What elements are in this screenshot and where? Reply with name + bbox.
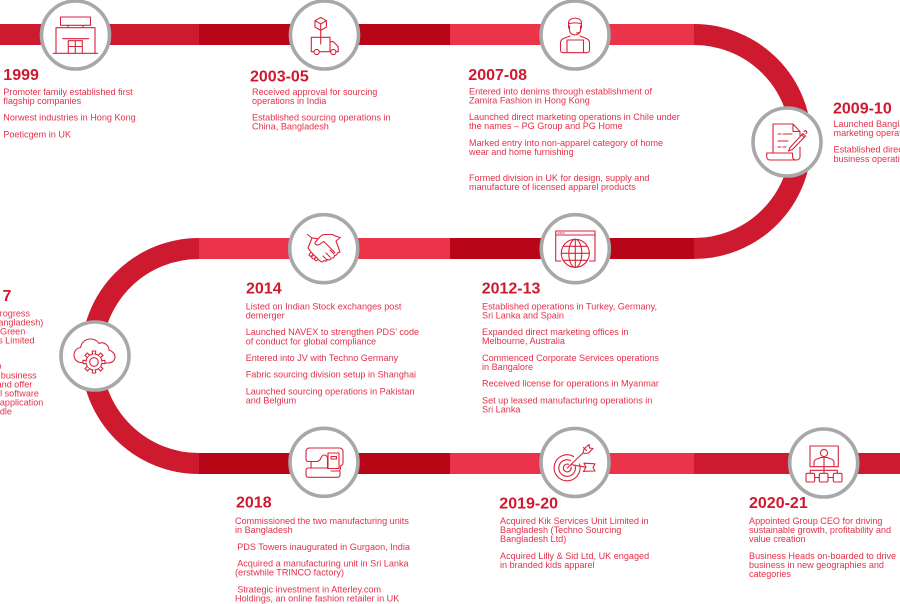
milestone: 2018 (235, 495, 411, 604)
milestone: 2019-20 (499, 495, 649, 570)
icon: storefront (42, 1, 110, 69)
milestone: 2014: Launched NAVEX to strengthen PDS’ code (246, 327, 419, 337)
milestone: 2014 (246, 281, 419, 406)
milestone: 2012-13: Sri Lanka (482, 405, 521, 415)
milestone: 2003-05 (250, 69, 391, 132)
milestone: 2003-05: Established sourcing operations in (252, 113, 391, 123)
milestone: cropped year ending in 7: l software (0, 388, 39, 398)
milestone: 2007-08: Marked entry into non-apparel category of home (469, 138, 663, 148)
milestone: 2007-08 (468, 67, 680, 192)
milestone: 2018: PDS Towers inaugurated in Gurgaon, India (237, 542, 411, 552)
milestone: 2020-21 (749, 495, 896, 579)
milestone: 2012-13: Sri Lanka and Spain (482, 310, 564, 320)
milestone: 2018: (erstwhile TRINCO factory) (235, 568, 344, 578)
milestone: 2018: Acquired a manufacturing unit in Sri Lanka (237, 559, 410, 569)
milestone: 2020-21: Appointed Group CEO for driving (749, 516, 882, 526)
milestone: 2012-13: Established operations in Turkey, Germany, (482, 301, 657, 311)
milestone: cropped year ending in 7: business (1, 370, 37, 380)
icon: target with arrows (541, 428, 609, 496)
milestone: 2009-10: 2009-10 (833, 101, 892, 118)
milestone: cropped year ending in 7: 7 (2, 288, 12, 305)
milestone: 2020-21: 2020-21 (749, 495, 808, 512)
milestone: 2018: Commissioned the two manufacturing units (235, 516, 409, 526)
milestone: 2019-20: Acquired Lilly & Sid Ltd, UK engaged (500, 551, 649, 561)
milestone: 2012-13: Commenced Corporate Services operations (482, 353, 659, 363)
milestone: 2012-13 (482, 281, 659, 415)
milestone: 2018: Holdings, an online fashion retailer in UK (235, 594, 399, 604)
milestone: 2007-08: Entered into denims through establishment of (469, 86, 652, 96)
milestone: 2007-08: the names – PG Group and PG Home (469, 121, 623, 131)
icon: document with pen (753, 108, 821, 176)
milestone: 1999: Poeticgem in UK (3, 129, 71, 139)
milestone: 2019-20: in branded kids apparel (500, 560, 595, 570)
icon: headset agent with laptop (541, 1, 609, 69)
milestone: 2007-08: wear and home furnishing (468, 147, 574, 157)
milestone: 2020-21: business in new geographies and (749, 560, 884, 570)
milestone: 2007-08: Launched direct marketing operations in Chile under (469, 112, 680, 122)
milestone: 2014: demerger (246, 310, 285, 320)
milestone: 2012-13: Melbourne, Australia (482, 336, 566, 346)
milestone: 2020-21: Business Heads on-boarded to drive (749, 551, 896, 561)
milestone: cropped year ending in 7: application (0, 397, 43, 407)
milestone: 2012-13: Set up leased manufacturing operations in (482, 396, 652, 406)
milestone: 2019-20: Bangladesh (Techno Sourcing (500, 525, 621, 535)
milestone: 2009-10 (833, 101, 900, 164)
icon: globe in browser window (541, 215, 609, 283)
milestone: 2014: Fabric sourcing division setup in Shanghai (246, 370, 416, 380)
milestone: cropped year ending in 7: rogress (0, 308, 30, 318)
icon: parcel and truck (290, 1, 358, 69)
milestone: 2012-13: 2012-13 (482, 281, 541, 298)
milestone: 2007-08: 2007-08 (468, 67, 527, 84)
icon: leader with org chart (790, 429, 858, 497)
icon: sewing machine (290, 428, 358, 496)
milestone: 2020-21: value creation (749, 534, 806, 544)
milestone: cropped year ending in 7: Green (0, 326, 25, 336)
milestone: 2012-13: Expanded direct marketing offices in (482, 327, 628, 337)
milestone: 2007-08: manufacture of licensed apparel products (469, 182, 636, 192)
milestone: 2007-08: Formed division in UK for design, supply and (469, 173, 649, 183)
icon: handshake (290, 215, 358, 283)
milestone: 2019-20: Bangladesh Ltd) (500, 534, 566, 544)
milestone: 2003-05: 2003-05 (250, 69, 309, 86)
milestone: 2014: of conduct for global compliance (246, 336, 376, 346)
milestone: 2014: Entered into JV with Techno Germany (246, 353, 399, 363)
milestone: 2012-13: in Bangalore (482, 362, 533, 372)
milestone: 2003-05: China, Bangladesh (252, 122, 329, 132)
milestone: 2018: 2018 (236, 495, 272, 512)
milestone: 1999: Norwest industries in Hong Kong (3, 113, 136, 123)
timeline path (0, 34, 900, 464)
milestone: 2019-20: 2019-20 (499, 495, 558, 512)
milestone: 2014: Launched sourcing operations in Pakistan (246, 387, 415, 397)
milestone: 1999: 1999 (3, 67, 39, 84)
milestone: 2019-20: Acquired Kik Services Unit Limited in (500, 516, 649, 526)
milestone: 2014: 2014 (246, 281, 282, 298)
milestone: 2018: Strategic investment in Atterley.com (237, 585, 381, 595)
milestone: 2007-08: Zamira Fashion in Hong Kong (469, 95, 590, 105)
milestone: 2014: and Belgium (246, 396, 296, 406)
milestone: 2018: in Bangladesh (235, 525, 293, 535)
milestone: 1999: Promoter family established first (3, 87, 133, 97)
milestone: 2020-21: categories (749, 569, 791, 579)
icon: cloud with gear (61, 322, 129, 390)
milestone: cropped year ending in 7: dle (0, 406, 12, 416)
milestone: 1999: flagship companies (3, 96, 82, 106)
milestone: cropped year ending in 7 (0, 288, 43, 416)
milestone: 1999 (3, 67, 136, 139)
milestone: 2014: Listed on Indian Stock exchanges post (246, 301, 402, 311)
milestone: 2003-05: Received approval for sourcing (252, 87, 377, 97)
milestone: 2012-13: Received license for operations in Myanmar (482, 379, 659, 389)
milestone: 2020-21: sustainable growth, profitability and (749, 525, 891, 535)
milestone: 2003-05: operations in India (252, 96, 327, 106)
